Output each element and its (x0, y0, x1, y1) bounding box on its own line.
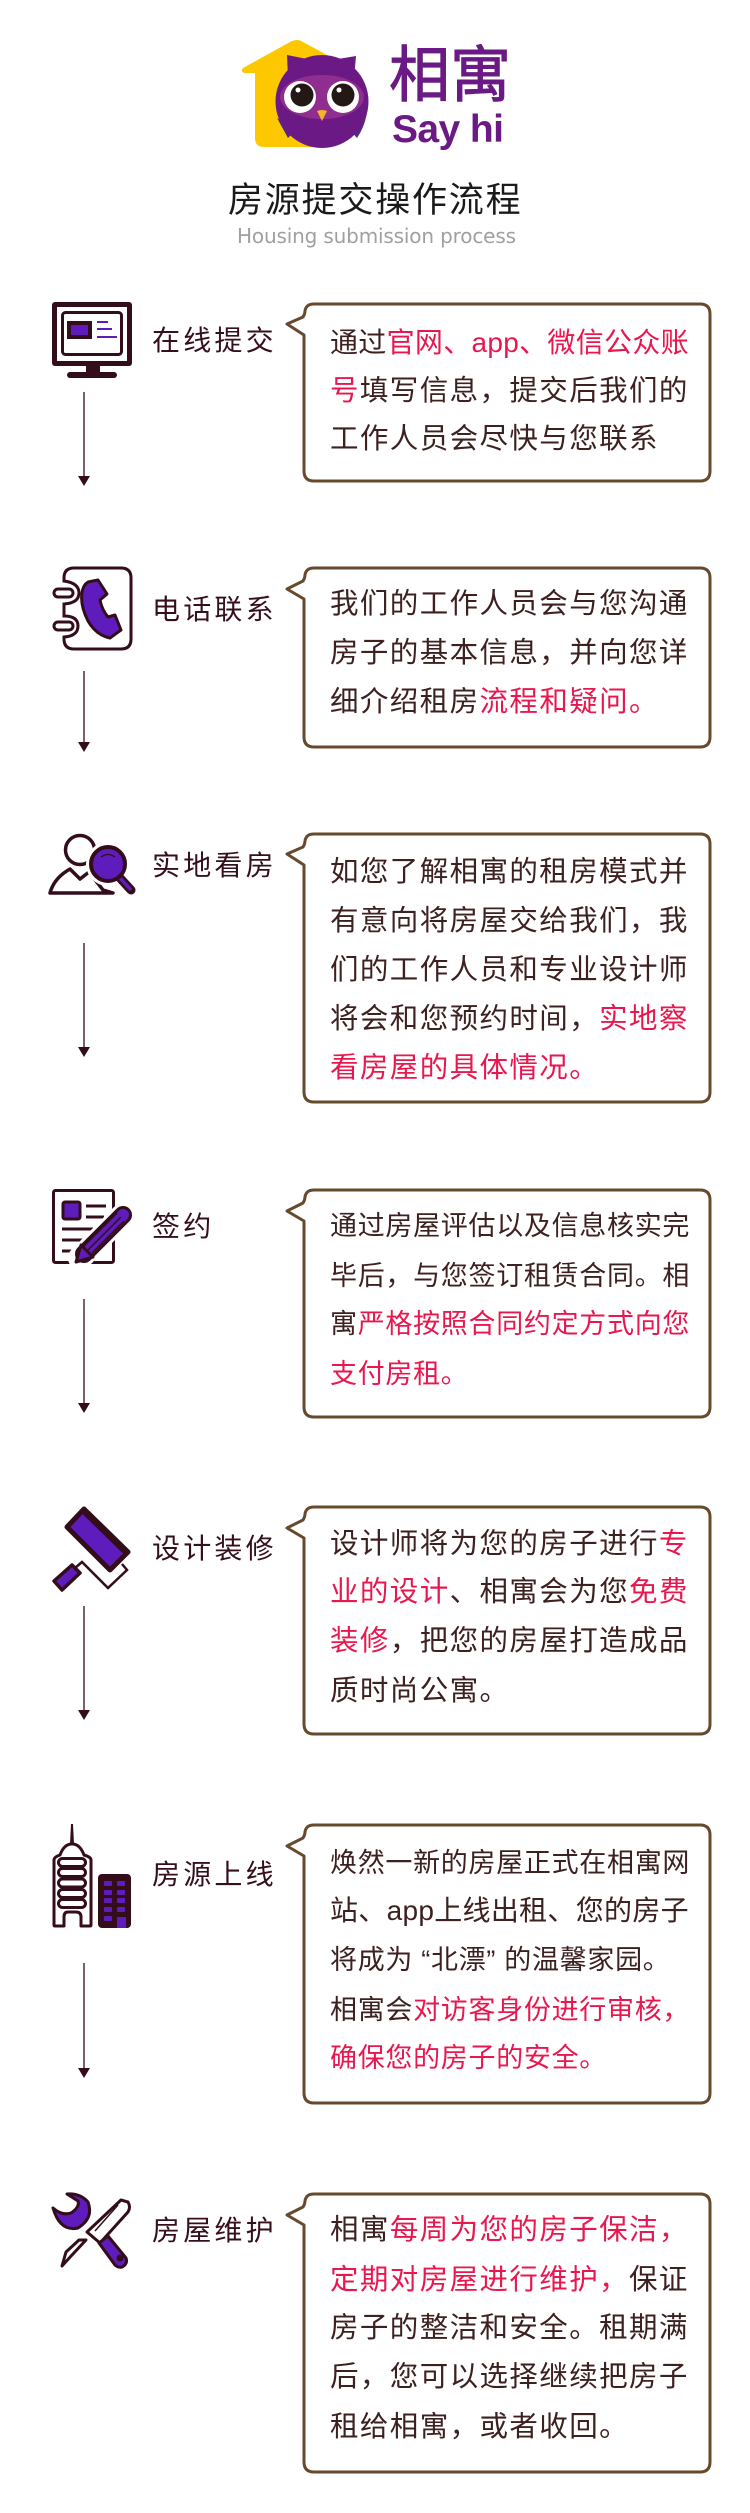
bubble text (330, 327, 689, 455)
bubble text (330, 588, 689, 718)
arrow (78, 1963, 90, 2078)
icon: paint roller (54, 1509, 128, 1590)
logo wordmark chinese: 相寓 (389, 41, 511, 109)
bubble text (330, 1528, 689, 1707)
logo wordmark say hi: Say hi (392, 108, 504, 151)
speech bubble (287, 304, 710, 481)
bubble text: 装修，把您的房屋打造成品 (330, 1625, 689, 1657)
bubble text: 支付房租。 (330, 1359, 468, 1389)
arrow (78, 392, 90, 486)
bubble text: 通过官网、app、微信公众账 (330, 327, 689, 358)
bubble text: 设计师将为您的房子进行专 (330, 1528, 689, 1560)
logo: owl in house (242, 40, 368, 148)
bubble text: 通过房屋评估以及信息核实完 (330, 1211, 690, 1241)
icon: buildings (54, 1824, 131, 1928)
icon: monitor (52, 302, 132, 378)
bubble text (330, 1211, 690, 1389)
bubble text (330, 2214, 689, 2443)
speech bubble (287, 1190, 710, 1417)
icon: person with magnifier (50, 836, 131, 893)
bubble text: 业的设计、相寓会为您免费 (330, 1576, 689, 1608)
step 6: listing online (54, 1824, 710, 2103)
bubble text: 寓严格按照合同约定方式向您 (330, 1309, 690, 1339)
arrow (78, 943, 90, 1057)
bubble text: 细介绍租房流程和疑问。 (330, 686, 659, 718)
bubble text: 定期对房屋进行维护，保证 (330, 2264, 689, 2296)
bubble text: 租给相寓，或者收回。 (330, 2411, 629, 2443)
step 5: design and renovation (54, 1507, 710, 1734)
arrow (78, 671, 90, 752)
step 3: on-site viewing (50, 834, 710, 1102)
bubble text: 们的工作人员和专业设计师 (330, 954, 689, 986)
bubble text: 号填写信息，提交后我们的 (330, 375, 689, 407)
bubble text: 将成为 “北漂” 的温馨家园。 (330, 1945, 670, 1975)
speech bubble (287, 1507, 710, 1734)
bubble text: 相寓会对访客身份进行审核， (330, 1995, 690, 2025)
bubble text: 如您了解相寓的租房模式并 (330, 856, 689, 888)
bubble text: 房子的整洁和安全。租期满 (330, 2312, 689, 2344)
title: 房源提交操作流程 (228, 181, 522, 220)
bubble text: 确保您的房子的安全。 (330, 2043, 607, 2073)
step 2: phone contact (54, 568, 710, 752)
bubble text: 我们的工作人员会与您沟通 (330, 588, 689, 620)
label: 在线提交 (152, 325, 277, 356)
bubble text: 看房屋的具体情况。 (330, 1052, 599, 1084)
bubble text: 房子的基本信息，并向您详 (330, 637, 689, 669)
bubble text: 有意向将房屋交给我们，我 (330, 905, 689, 937)
bubble text (330, 856, 689, 1084)
arrow (78, 1606, 90, 1720)
header: logo and title (228, 40, 522, 248)
bubble text: 毕后，与您签订租赁合同。相 (330, 1261, 690, 1291)
label: 设计装修 (152, 1533, 277, 1564)
bubble text: 将会和您预约时间，实地察 (330, 1003, 689, 1035)
speech bubble (287, 834, 710, 1102)
bubble text: 工作人员会尽快与您联系 (330, 423, 659, 455)
step 4: signing (54, 1190, 710, 1417)
icon: wrench and screwdriver (53, 2194, 130, 2267)
step 1: online submission (52, 302, 710, 486)
speech bubble (287, 568, 710, 747)
bubble text: 后，您可以选择继续把房子 (330, 2361, 689, 2393)
arrow (78, 1299, 90, 1413)
bubble text (330, 1848, 690, 2073)
icon: document and pencil (54, 1190, 124, 1262)
subtitle: Housing submission process (237, 224, 516, 248)
bubble text: 质时尚公寓。 (330, 1675, 509, 1707)
label: 房屋维护 (152, 2215, 277, 2246)
bubble text: 站、app上线出租、您的房子 (330, 1895, 689, 1926)
label: 实地看房 (152, 850, 277, 881)
bubble text: 相寓每周为您的房子保洁， (330, 2214, 689, 2246)
step 7: house maintenance (53, 2194, 710, 2472)
speech bubble (287, 1825, 710, 2103)
bubble text: 焕然一新的房屋正式在相寓网 (330, 1848, 690, 1878)
speech bubble (287, 2194, 710, 2472)
label: 房源上线 (152, 1859, 277, 1890)
label: 签约 (152, 1211, 214, 1242)
label: 电话联系 (152, 594, 277, 625)
icon: phone book (54, 568, 131, 649)
